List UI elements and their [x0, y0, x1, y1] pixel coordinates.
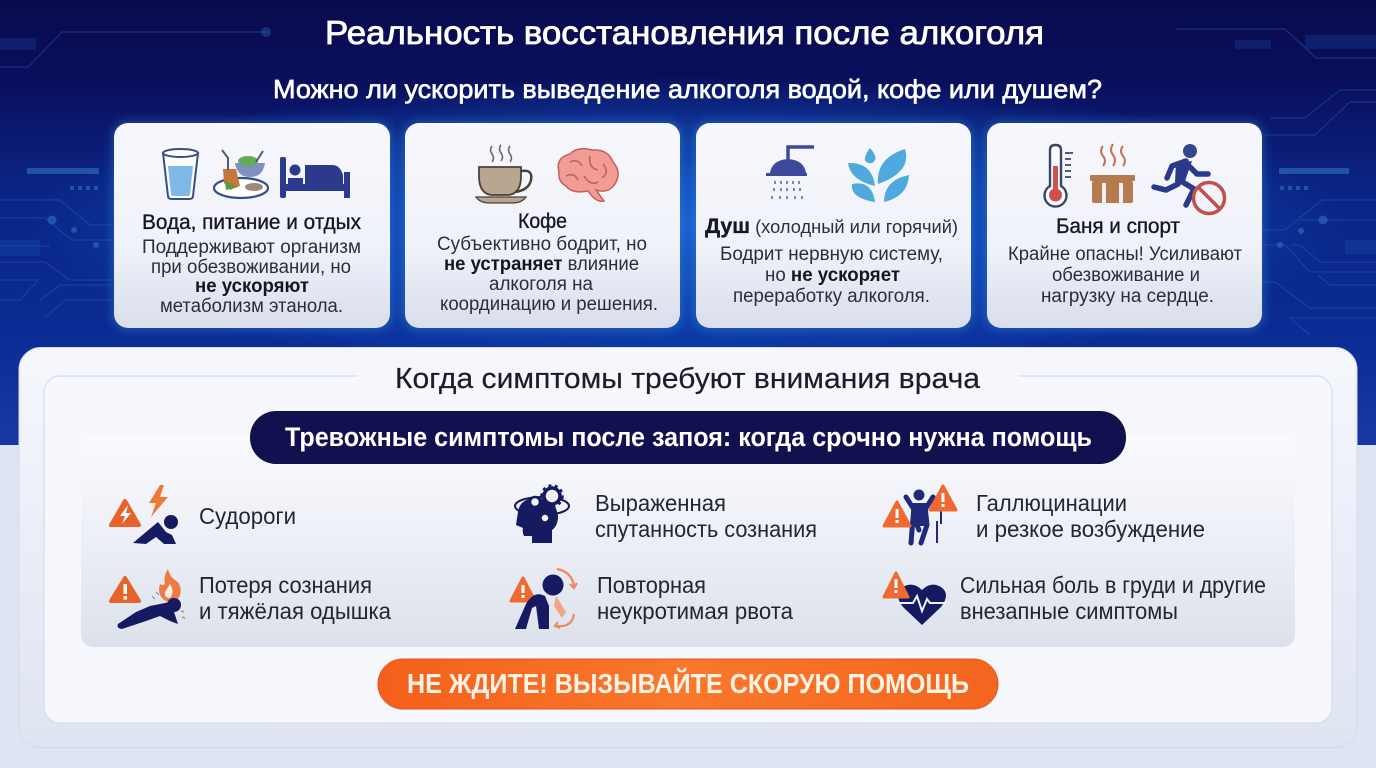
- gray symptoms background: [81, 436, 1295, 647]
- call to action button: НЕ ЖДИТЕ! ВЫЗЫВАЙТЕ СКОРУЮ ПОМОЩЬ: [407, 667, 969, 699]
- subtitle question: Можно ли ускорить выведение алкоголя водой, кофе или душем?: [273, 74, 1102, 104]
- card text: Крайне опасны! Усиливают: [1008, 244, 1242, 265]
- card heading: Баня и спорт: [1056, 215, 1180, 238]
- icon: bed: [280, 157, 350, 198]
- icon: warning and lightning with lying person: [111, 485, 178, 544]
- symptom: chest pain: внезапные симптомы: [960, 598, 1178, 624]
- symptom: chest pain: [884, 572, 1266, 625]
- icon: heart with pulse and warning: [884, 573, 946, 625]
- section heading: Когда симптомы требуют внимания врача: [395, 363, 981, 395]
- card text: [142, 237, 361, 317]
- icon: water splash: [848, 148, 909, 202]
- icon: coffee cup: [476, 145, 531, 203]
- card heading: Вода, питание и отдых: [142, 211, 361, 234]
- icon: glass of water: [163, 149, 198, 199]
- icon: running figure with prohibition sign: [1154, 144, 1224, 214]
- symptom: severe confusion: спутанность сознания: [595, 516, 817, 542]
- icon: warning, flame and fallen person: [111, 569, 185, 629]
- card text: алкоголя на: [489, 274, 593, 295]
- card text: Субъективно бодрит, но: [437, 234, 647, 255]
- banner: alarming symptoms: Тревожные симптомы после запоя: когда срочно нужна помощь: [285, 422, 1092, 452]
- card text: при обезвоживании, но: [151, 257, 351, 278]
- card heading: Душ (холодный или горячий): [705, 215, 958, 238]
- symptom: repeated vomiting: [511, 569, 793, 629]
- icon: agitated person with warnings: [884, 486, 956, 543]
- icon: head with gears: [515, 486, 569, 543]
- icon: food plate: [214, 150, 268, 198]
- symptom: repeated vomiting: Повторная: [597, 572, 706, 598]
- symptom: loss of consciousness: и тяжёлая одышка: [199, 598, 391, 624]
- symptom: seizures: Судороги: [199, 503, 296, 529]
- card heading: Кофе: [518, 210, 567, 233]
- icon: sauna bucket and steam: [1090, 144, 1135, 203]
- symptom: repeated vomiting: неукротимая рвота: [597, 598, 793, 624]
- card text: Поддерживают организм: [142, 237, 361, 258]
- panel: coffee: [403, 121, 682, 330]
- card text: [1008, 244, 1242, 307]
- symptom: seizures: [111, 485, 296, 544]
- symptom: severe confusion: Выраженная: [595, 490, 726, 516]
- card text: но не ускоряет: [765, 265, 900, 286]
- icon: brain: [558, 149, 618, 201]
- call to action button: [378, 659, 998, 709]
- panel: shower: [694, 121, 973, 330]
- symptom: severe confusion: [515, 486, 817, 543]
- card text: [437, 234, 658, 315]
- card text: не устраняет влияние: [444, 254, 639, 275]
- symptom: hallucinations: [884, 486, 1205, 543]
- icon: warning and person vomiting: [511, 569, 577, 629]
- card text: обезвоживание и: [1052, 265, 1200, 286]
- title: Реальность восстановления после алкоголя: [325, 14, 1044, 51]
- symptom: loss of consciousness: [111, 569, 391, 629]
- symptom: hallucinations: и резкое возбуждение: [976, 516, 1205, 542]
- panel: water, food and rest: [112, 121, 392, 330]
- symptom: loss of consciousness: Потеря сознания: [199, 572, 372, 598]
- card text: Бодрит нервную систему,: [720, 244, 943, 265]
- card text: координацию и решения.: [440, 294, 658, 315]
- banner: alarming symptoms: [250, 411, 1126, 464]
- card text: переработку алкоголя.: [733, 286, 930, 307]
- card text: [720, 244, 943, 307]
- symptom: chest pain: Сильная боль в груди и другие: [960, 572, 1266, 598]
- icon: thermometer: [1045, 145, 1073, 207]
- card text: метаболизм этанола.: [160, 296, 343, 317]
- card text: не ускоряют: [195, 276, 309, 297]
- panel: sauna and sport: [985, 121, 1264, 330]
- panel: when symptoms need a doctor: [19, 348, 1357, 748]
- card text: нагрузку на сердце.: [1041, 286, 1214, 307]
- icon: shower head: [766, 147, 814, 199]
- symptom: hallucinations: Галлюцинации: [976, 490, 1127, 516]
